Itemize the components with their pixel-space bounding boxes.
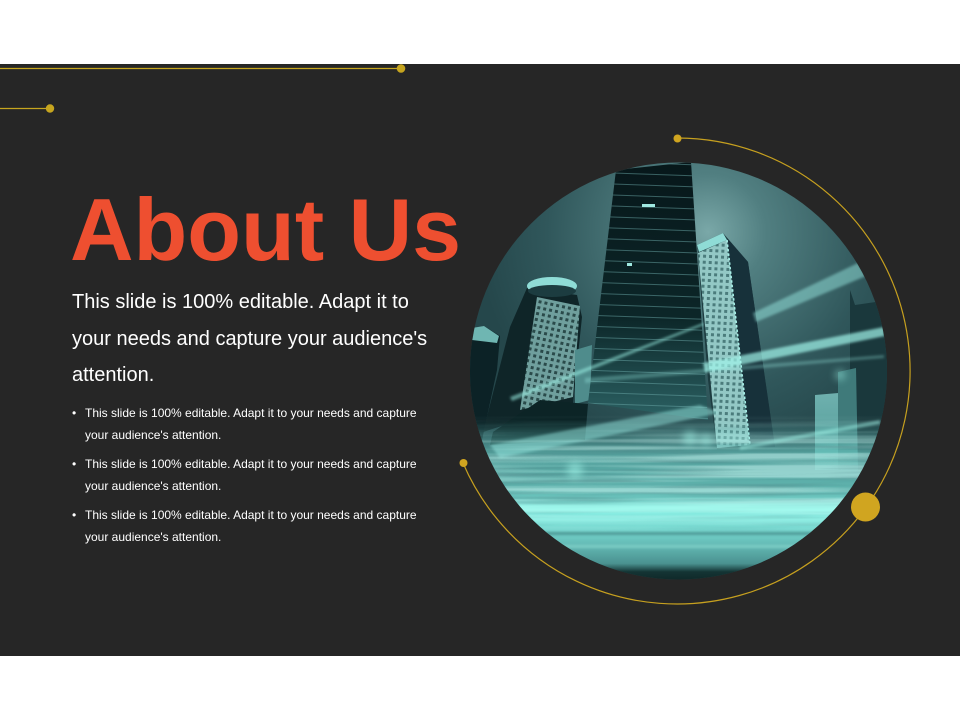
bullet 2: your audience's attention. (85, 479, 221, 493)
bullet 2: • (72, 457, 76, 471)
bullet 1: This slide is 100% editable. Adapt it to your needs and capture (85, 406, 417, 420)
lead paragraph: attention. (72, 364, 154, 386)
bullet 3: This slide is 100% editable. Adapt it to your needs and capture (85, 508, 417, 522)
bullet 1 (72, 406, 417, 442)
bullet 3: • (72, 508, 76, 522)
lead paragraph: This slide is 100% editable. Adapt it to (72, 291, 409, 313)
bullet 1: your audience's attention. (85, 428, 221, 442)
arc start dot (674, 134, 682, 142)
graphic: circular photo with gold arcs and connector lines (0, 64, 911, 605)
photo: city skyscrapers with teal light trails (465, 158, 895, 585)
connector line: top with dot (0, 64, 405, 73)
bullet 3: your audience's attention. (85, 530, 221, 544)
bullet 3 (72, 508, 417, 544)
gold orbit arc (463, 138, 910, 604)
connector line: short with dot (0, 104, 54, 113)
arc end dot (460, 459, 468, 467)
lead paragraph (72, 291, 427, 386)
title: About Us (70, 180, 461, 279)
large gold dot (851, 492, 880, 522)
lead paragraph: your needs and capture your audience's (72, 328, 427, 350)
bullet 2 (72, 457, 417, 493)
bullet 1: • (72, 406, 76, 420)
bullet 2: This slide is 100% editable. Adapt it to your needs and capture (85, 457, 417, 471)
